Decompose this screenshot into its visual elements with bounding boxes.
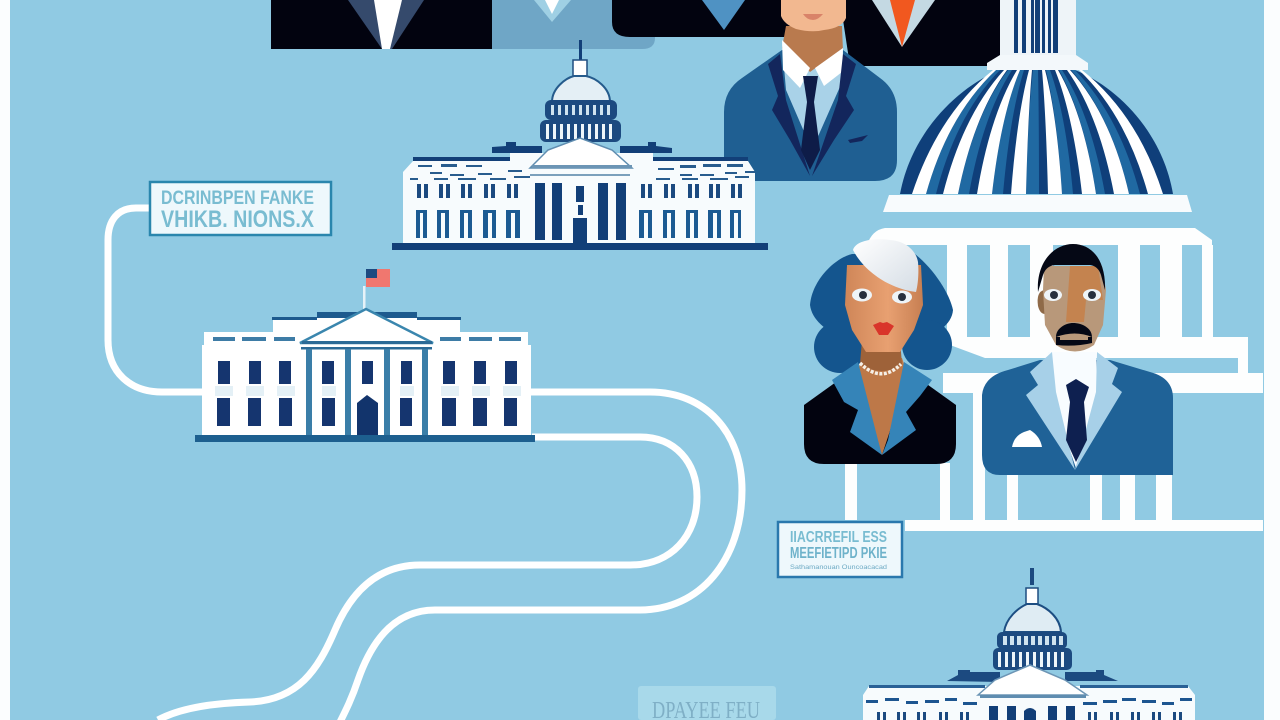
balcony shading (215, 386, 521, 396)
hair (1038, 244, 1105, 292)
capitol colonnade behind portraits (845, 228, 1263, 531)
panel: black portrait left (271, 0, 492, 49)
ear (1038, 290, 1045, 314)
goatee (1056, 323, 1092, 346)
middle bar (950, 337, 1248, 373)
spire and cupola (1030, 568, 1034, 585)
dome (1004, 604, 1061, 632)
columns (535, 183, 626, 240)
portrait: man in blue suit (724, 0, 897, 181)
label box: middle right: MEEFIETIPD PKIE (790, 545, 887, 562)
frieze dashes (410, 164, 755, 180)
pocket (848, 135, 868, 143)
connector path: outer winding route (340, 392, 742, 720)
pediment (978, 665, 1087, 695)
portrait: man in blue suit with goatee (982, 244, 1173, 475)
chest (856, 358, 908, 455)
lapels (768, 54, 810, 176)
lower columns (845, 393, 1172, 520)
eyes (852, 288, 912, 304)
neck (860, 340, 902, 371)
pediment (300, 309, 433, 343)
windows (877, 712, 1182, 720)
base (195, 435, 535, 442)
frieze dashes (866, 698, 1192, 705)
main block (863, 686, 1195, 720)
hair (810, 254, 953, 373)
jacket (804, 372, 956, 464)
jacket (982, 360, 1173, 475)
roof line (869, 685, 1188, 688)
lower windows (217, 398, 517, 426)
shirt (1048, 352, 1098, 468)
label box: upper left: VHIKB. NIONS.X (161, 206, 314, 233)
lower windows (416, 210, 741, 238)
flag (363, 269, 390, 310)
lips (873, 322, 894, 335)
entablature (867, 228, 1212, 245)
dome mid-blue bands (926, 70, 1140, 194)
dome (552, 76, 610, 102)
connector path: label to White House (108, 208, 204, 392)
tie (801, 76, 820, 170)
pocket square (1012, 430, 1042, 447)
white house building (195, 269, 535, 442)
portrait: woman in black jacket (804, 239, 956, 464)
label box: bottom centre (638, 686, 776, 720)
panel: black portrait centre (612, 0, 790, 37)
eyes (1044, 289, 1101, 301)
frieze (213, 337, 521, 341)
neck and head (1043, 266, 1106, 352)
top portrait panels (271, 0, 1000, 66)
panel: grey-blue portrait (492, 0, 655, 49)
lapels (832, 362, 932, 455)
lapels (1026, 352, 1122, 470)
roof lines (413, 157, 748, 161)
necklace (860, 363, 901, 374)
large capitol dome (883, 0, 1192, 212)
upper windows (417, 184, 742, 198)
lower bar (943, 373, 1263, 393)
label box: middle right: Sathamanouan Ouncoacacad (790, 565, 887, 571)
connector path: inner winding route (158, 437, 697, 720)
columns (306, 349, 428, 435)
neck (782, 26, 843, 76)
drum (993, 632, 1072, 670)
label box: middle right (778, 522, 902, 577)
door (357, 395, 378, 435)
label box: upper left: DCRINBPEN FANKE (161, 188, 314, 209)
columns and entry (989, 706, 1075, 720)
face (845, 265, 923, 352)
shirt (782, 44, 843, 150)
plinth (905, 520, 1263, 531)
lips (803, 14, 823, 20)
head (781, 0, 846, 31)
main block (403, 153, 755, 243)
wings (947, 670, 1118, 682)
upper roof (317, 312, 417, 327)
hair swoop (853, 239, 918, 292)
cupola columns (987, 0, 1088, 70)
capitol building: bottom right (863, 568, 1195, 720)
panel: black portrait right (840, 0, 1000, 66)
spire and cupola (579, 40, 582, 60)
capitol building: centre (392, 40, 768, 250)
upper wings (492, 142, 672, 153)
entry (573, 186, 587, 243)
pediment (530, 138, 632, 168)
jacket (724, 50, 897, 181)
upper windows (218, 361, 517, 384)
dome shell (900, 70, 1173, 194)
upper columns (947, 245, 1213, 337)
dome base (883, 195, 1192, 212)
label box: middle right: IIACRREFIL ESS (790, 529, 887, 546)
base (392, 243, 768, 250)
dome white ribs (912, 70, 1163, 194)
label box: upper left (150, 182, 331, 235)
main block (202, 332, 531, 435)
tie (1066, 379, 1089, 462)
drum (540, 100, 621, 142)
